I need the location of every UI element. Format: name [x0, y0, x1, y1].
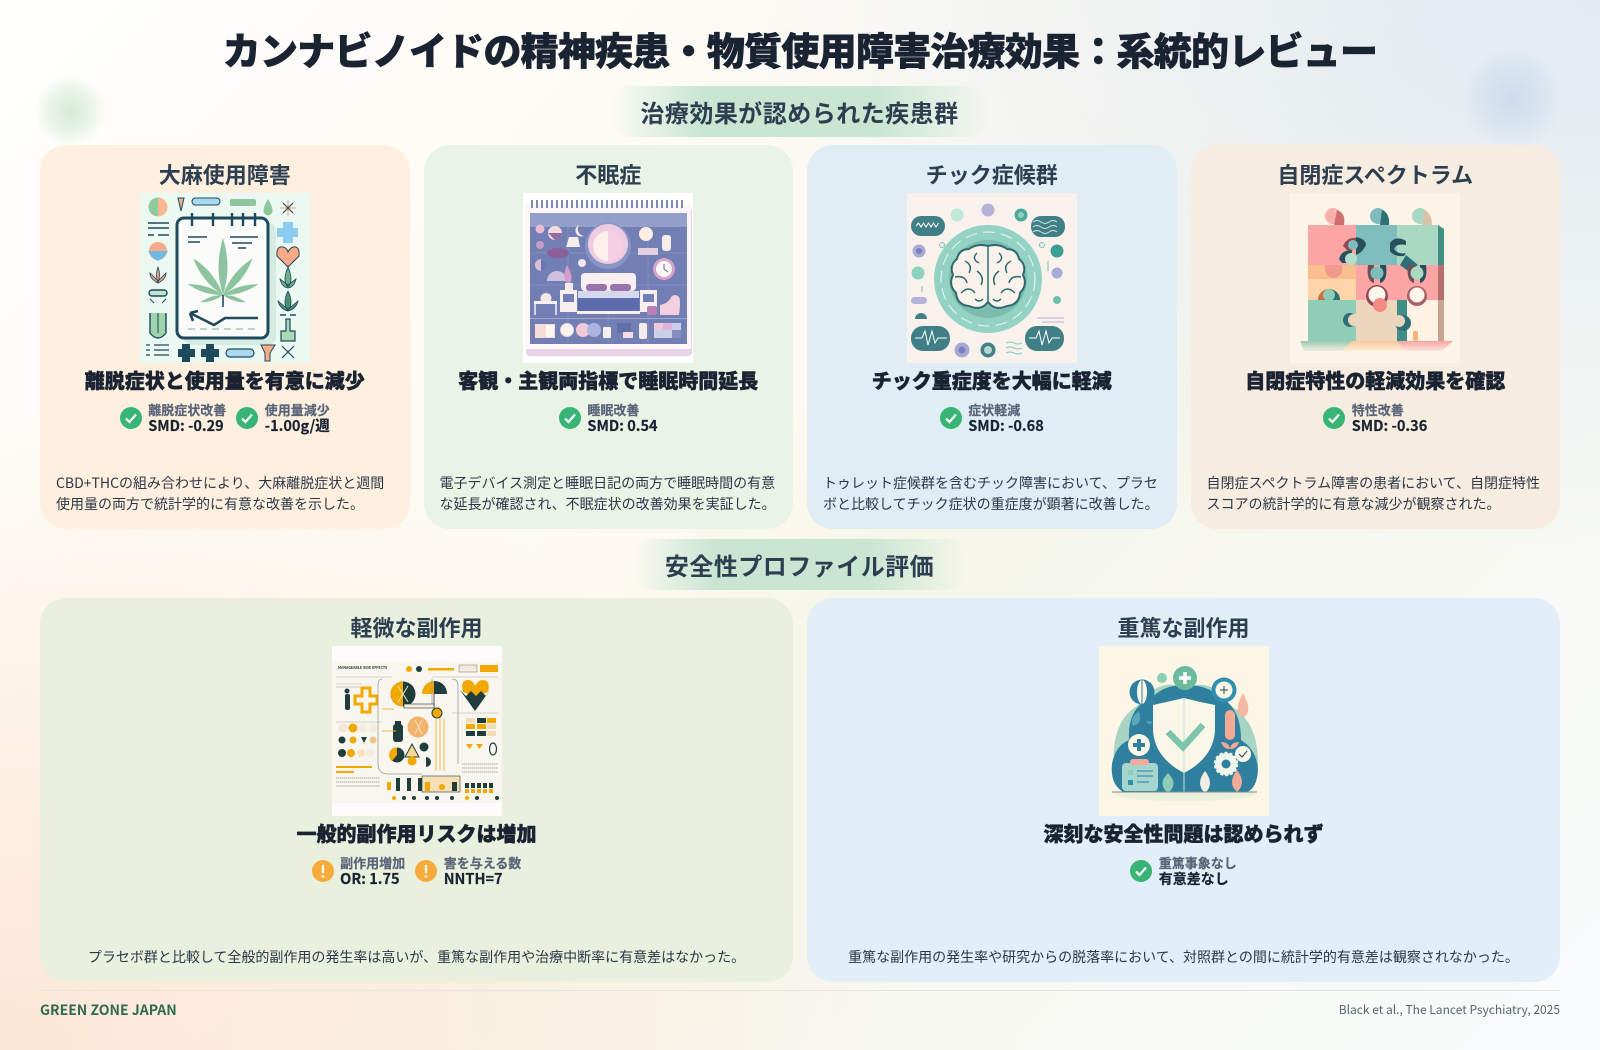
illustration: side effects infographic: MANAGEABLE SIDE EFFECTS — [338, 666, 388, 671]
description: な延長が確認され、不眠症状の改善効果を実証した。 — [440, 494, 776, 514]
metric: symptom reduction: 症状軽減 — [968, 400, 1020, 419]
metric: withdrawal: SMD: -0.29 — [148, 415, 224, 436]
panel: autism spectrum — [1190, 145, 1560, 529]
card title: 自閉症スペクトラム — [1277, 158, 1473, 190]
card title: 軽微な副作用 — [350, 611, 482, 643]
metric: NNTH: 害を与える数 — [444, 853, 521, 872]
metric: serious events: 有意差なし — [1159, 869, 1229, 889]
description: 電子デバイス測定と睡眠日記の両方で睡眠時間の有意 — [440, 472, 775, 492]
description: 重篤な副作用の発生率や研究からの脱落率において、対照群との間に統計学的有意差は観察されなかった。 — [848, 946, 1519, 966]
metric: withdrawal — [120, 400, 226, 436]
metric: trait improvement: 特性改善 — [1352, 400, 1404, 419]
panel: cannabis use disorder — [40, 145, 410, 529]
description: プラセボ群と比較して全般的副作用の発生率は高いが、重篤な副作用や治療中断率に有意差はなかった。 — [88, 946, 745, 966]
metric: serious events: 重篤事象なし — [1159, 853, 1237, 872]
panel: mild side effects — [40, 598, 793, 982]
metric: sleep — [559, 400, 658, 436]
key finding: 客観・主観両指標で睡眠時間延長 — [458, 365, 758, 394]
metric: NNTH — [415, 853, 522, 889]
background blob: green — [35, 76, 105, 146]
section heading: safety — [633, 539, 966, 590]
title: カンナビノイドの精神疾患・物質使用障害治療効果：系統的レビュー — [223, 21, 1377, 76]
description: CBD+THCの組み合わせにより、大麻離脱症状と週間 — [56, 472, 384, 492]
metrics — [120, 400, 330, 436]
section heading: efficacy: 治療効果が認められた疾患群 — [640, 94, 959, 129]
description: スコアの統計学的に有意な減少が観察された。 — [1206, 494, 1500, 514]
footer source: Black et al., The Lancet Psychiatry, 2025 — [1339, 1001, 1560, 1018]
metrics — [1130, 853, 1237, 889]
metric: symptom reduction: SMD: -0.68 — [968, 415, 1044, 436]
illustration: brain — [907, 193, 1077, 363]
metrics — [559, 400, 658, 436]
metrics — [312, 853, 522, 889]
description: 自閉症スペクトラム障害の患者において、自閉症特性 — [1206, 472, 1540, 492]
panel: serious side effects — [807, 598, 1560, 982]
description — [56, 472, 384, 514]
panel: tic disorders — [807, 145, 1176, 529]
description — [440, 472, 776, 514]
key finding: 深刻な安全性問題は認められず — [1044, 818, 1324, 847]
card title: 大麻使用障害 — [159, 158, 291, 190]
key finding: 自閉症特性の軽減効果を確認 — [1245, 365, 1505, 394]
metric: trait improvement: SMD: -0.36 — [1352, 415, 1427, 436]
card title: 重篤な副作用 — [1117, 611, 1250, 643]
illustration: puzzle — [1300, 208, 1453, 351]
illustration: cannabis notebook — [140, 193, 310, 363]
metric: use reduction — [236, 400, 330, 436]
description — [1206, 472, 1540, 514]
metric: sleep: 睡眠改善 — [587, 400, 639, 419]
metric: odds ratio: OR: 1.75 — [340, 868, 400, 889]
metric: symptom reduction — [940, 400, 1044, 436]
key finding: 離脱症状と使用量を有意に減少 — [85, 365, 365, 394]
footer rule — [40, 990, 1560, 991]
illustration: side effects infographic — [332, 646, 502, 816]
metrics — [1323, 400, 1427, 436]
footer brand: GREEN ZONE JAPAN — [40, 1000, 177, 1020]
description: トゥレット症候群を含むチック障害において、プラセ — [823, 472, 1158, 492]
description — [823, 472, 1159, 514]
metric: use reduction: -1.00g/週 — [265, 415, 330, 436]
illustration: shield — [1099, 646, 1269, 816]
section heading: efficacy — [609, 86, 990, 137]
metric: odds ratio — [312, 853, 405, 889]
metric: sleep: SMD: 0.54 — [587, 415, 658, 436]
background blob: blue — [1462, 48, 1562, 148]
card title: 不眠症 — [575, 158, 641, 190]
description: 使用量の両方で統計学的に有意な改善を示した。 — [56, 494, 364, 514]
section heading: safety: 安全性プロファイル評価 — [665, 547, 934, 582]
panel: insomnia — [424, 145, 793, 529]
metric: serious events — [1130, 853, 1237, 889]
metric: trait improvement — [1323, 400, 1427, 436]
metric: withdrawal: 離脱症状改善 — [148, 400, 226, 419]
metric: NNTH: NNTH=7 — [444, 868, 503, 889]
metric: use reduction: 使用量減少 — [265, 400, 330, 419]
illustration: bedroom calendar — [523, 193, 693, 363]
card title: チック症候群 — [926, 158, 1058, 190]
metric: odds ratio: 副作用増加 — [340, 853, 405, 872]
metrics — [940, 400, 1044, 436]
key finding: 一般的副作用リスクは増加 — [296, 818, 536, 847]
description: ボと比較してチック症状の重症度が顕著に改善した。 — [823, 494, 1159, 514]
key finding: チック重症度を大幅に軽減 — [872, 365, 1112, 394]
